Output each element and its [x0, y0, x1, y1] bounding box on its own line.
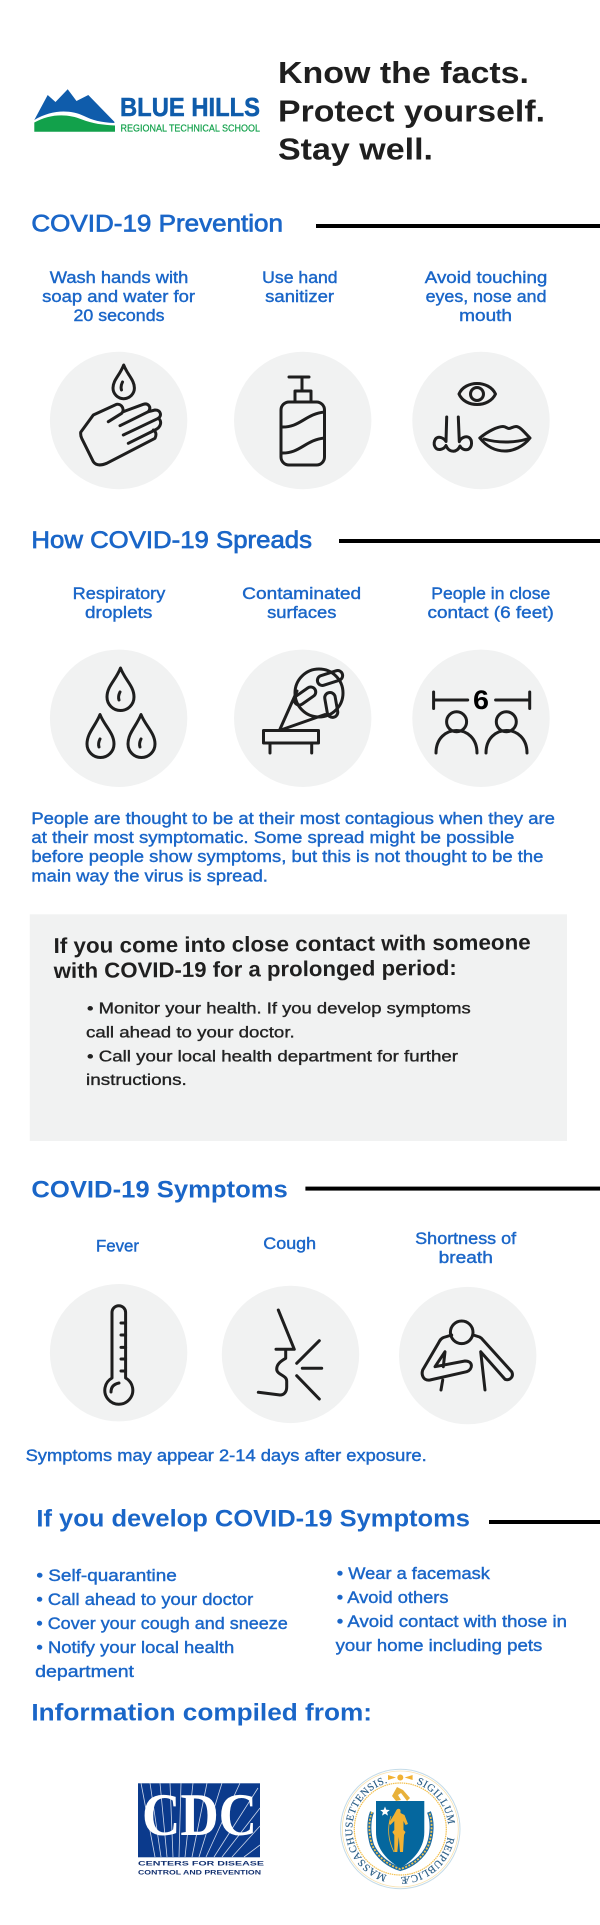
icon: shortness of breath: [399, 1287, 536, 1424]
list: left actions: • Call ahead to your doctor: [36, 1591, 254, 1609]
list: right actions: your home including pets: [336, 1637, 542, 1655]
list: left actions: department: [35, 1663, 134, 1681]
label: contaminated surfaces: surfaces: [267, 604, 336, 622]
title: Protect yourself.: [278, 94, 545, 128]
heading: COVID-19 Prevention: COVID-19 Prevention: [31, 211, 283, 238]
icon: contaminated surface: [234, 650, 371, 787]
label: avoid touching: eyes, nose and: [426, 288, 546, 306]
list: left actions: • Cover your cough and sneeze: [36, 1615, 288, 1633]
label: shortness of breath: breath: [439, 1249, 493, 1267]
label: avoid touching: Avoid touching: [425, 269, 547, 287]
panel bullets: • Call your local health department for further: [87, 1048, 459, 1065]
logo: Massachusetts state seal: SIGILLUM: [417, 1778, 455, 1824]
label: hand sanitizer: Use hand: [262, 269, 338, 287]
label: hand sanitizer: [262, 269, 338, 306]
logo: CDC: CENTERS FOR DISEASE: [138, 1861, 265, 1868]
label: avoid touching: mouth: [459, 307, 512, 325]
text: symptoms note: Symptoms may appear 2-14 days after exposure.: [26, 1447, 427, 1465]
label: fever: Fever: [96, 1237, 140, 1255]
text: contagious paragraph: [31, 810, 555, 886]
label: contaminated surfaces: [242, 585, 361, 622]
text: contagious paragraph: main way the virus is spread.: [31, 868, 268, 886]
panel bullets: [86, 1001, 471, 1089]
heading: If you develop COVID-19 Symptoms: If you develop COVID-19 Symptoms: [36, 1506, 470, 1533]
icon: eye nose mouth: [412, 352, 550, 489]
label: shortness of breath: Shortness of: [415, 1230, 517, 1248]
icon: sanitizer bottle: [234, 352, 371, 489]
heading: COVID-19 Symptoms: COVID-19 Symptoms: [31, 1176, 288, 1204]
heading: How COVID-19 Spreads: How COVID-19 Spreads: [31, 527, 312, 554]
label: avoid touching: [425, 269, 547, 325]
panel bullets: call ahead to your doctor.: [86, 1024, 295, 1042]
logo: CDC: CONTROL AND PREVENTION: [138, 1869, 261, 1876]
heading: How COVID-19 Spreads: [31, 527, 600, 554]
heading: COVID-19 Prevention: [31, 211, 600, 238]
icon: respiratory droplets: [50, 650, 187, 787]
label: respiratory droplets: [73, 585, 166, 622]
logo: Massachusetts state seal: MASSACHUSETTENSIS.: [345, 1778, 387, 1882]
label: wash hands: 20 seconds: [74, 307, 164, 325]
logo: Blue Hills Regional Technical School: [34, 89, 260, 135]
icon: cough: [222, 1286, 359, 1423]
text: contagious paragraph: People are thought to be at their most contagious when they are: [31, 810, 555, 828]
logo: CDC: CDC: [142, 1782, 257, 1848]
logo: Massachusetts state seal: [340, 1768, 460, 1890]
heading: COVID-19 Symptoms: [31, 1176, 600, 1204]
title: Know the facts.: [278, 55, 529, 90]
text: contagious paragraph: at their most symptomatic. Some spread might be possible: [31, 829, 514, 847]
panel: close contact: [30, 914, 567, 1141]
label: respiratory droplets: droplets: [85, 604, 152, 622]
list: left actions: • Notify your local health: [36, 1639, 234, 1657]
list: left actions: [35, 1567, 288, 1681]
label: shortness of breath: [415, 1230, 517, 1267]
panel heading: with COVID-19 for a prolonged period:: [53, 956, 457, 983]
label: contaminated surfaces: Contaminated: [242, 585, 361, 603]
shield and figure: [369, 1787, 432, 1869]
icon: thermometer: [50, 1284, 187, 1421]
top ornament: [388, 1774, 413, 1780]
label: respiratory droplets: Respiratory: [73, 585, 166, 603]
icon: six feet distance: [412, 650, 550, 787]
panel heading: [52, 930, 531, 983]
label: hand sanitizer: sanitizer: [265, 288, 335, 306]
logo: Blue Hills Regional Technical School: BLUE HILLS: [120, 94, 260, 122]
title: Stay well.: [278, 132, 433, 166]
label: wash hands: Wash hands with: [50, 269, 188, 287]
list: right actions: [336, 1565, 567, 1655]
panel bullets: • Monitor your health. If you develop symptoms: [87, 1001, 471, 1018]
logo: Blue Hills Regional Technical School: REGIONAL TECHNICAL SCHOOL: [120, 123, 260, 135]
label: cough: Cough: [263, 1235, 316, 1253]
text: contagious paragraph: before people show symptoms, but this is not thought to be the: [31, 848, 543, 866]
label: people in close contact: [428, 585, 554, 622]
list: right actions: • Avoid contact with those in: [337, 1613, 567, 1631]
label: people in close contact: contact (6 feet): [428, 604, 554, 622]
heading: Information compiled from: Information compiled from:: [31, 1700, 372, 1727]
panel heading: If you come into close contact with someone: [53, 930, 531, 958]
logo: Massachusetts state seal: REIPUBLICÆ: [401, 1837, 454, 1884]
label: wash hands: soap and water for: [42, 288, 196, 306]
icon: hand washing: [50, 352, 187, 489]
list: right actions: • Avoid others: [337, 1589, 448, 1607]
logo: CDC: [138, 1782, 265, 1876]
panel bullets: instructions.: [86, 1072, 187, 1089]
list: left actions: • Self-quarantine: [36, 1567, 177, 1585]
label: wash hands: [42, 269, 196, 325]
label: people in close contact: People in close: [431, 585, 550, 603]
icon: six feet distance: 6: [473, 685, 489, 715]
title: [278, 55, 545, 166]
list: right actions: • Wear a facemask: [337, 1565, 491, 1583]
